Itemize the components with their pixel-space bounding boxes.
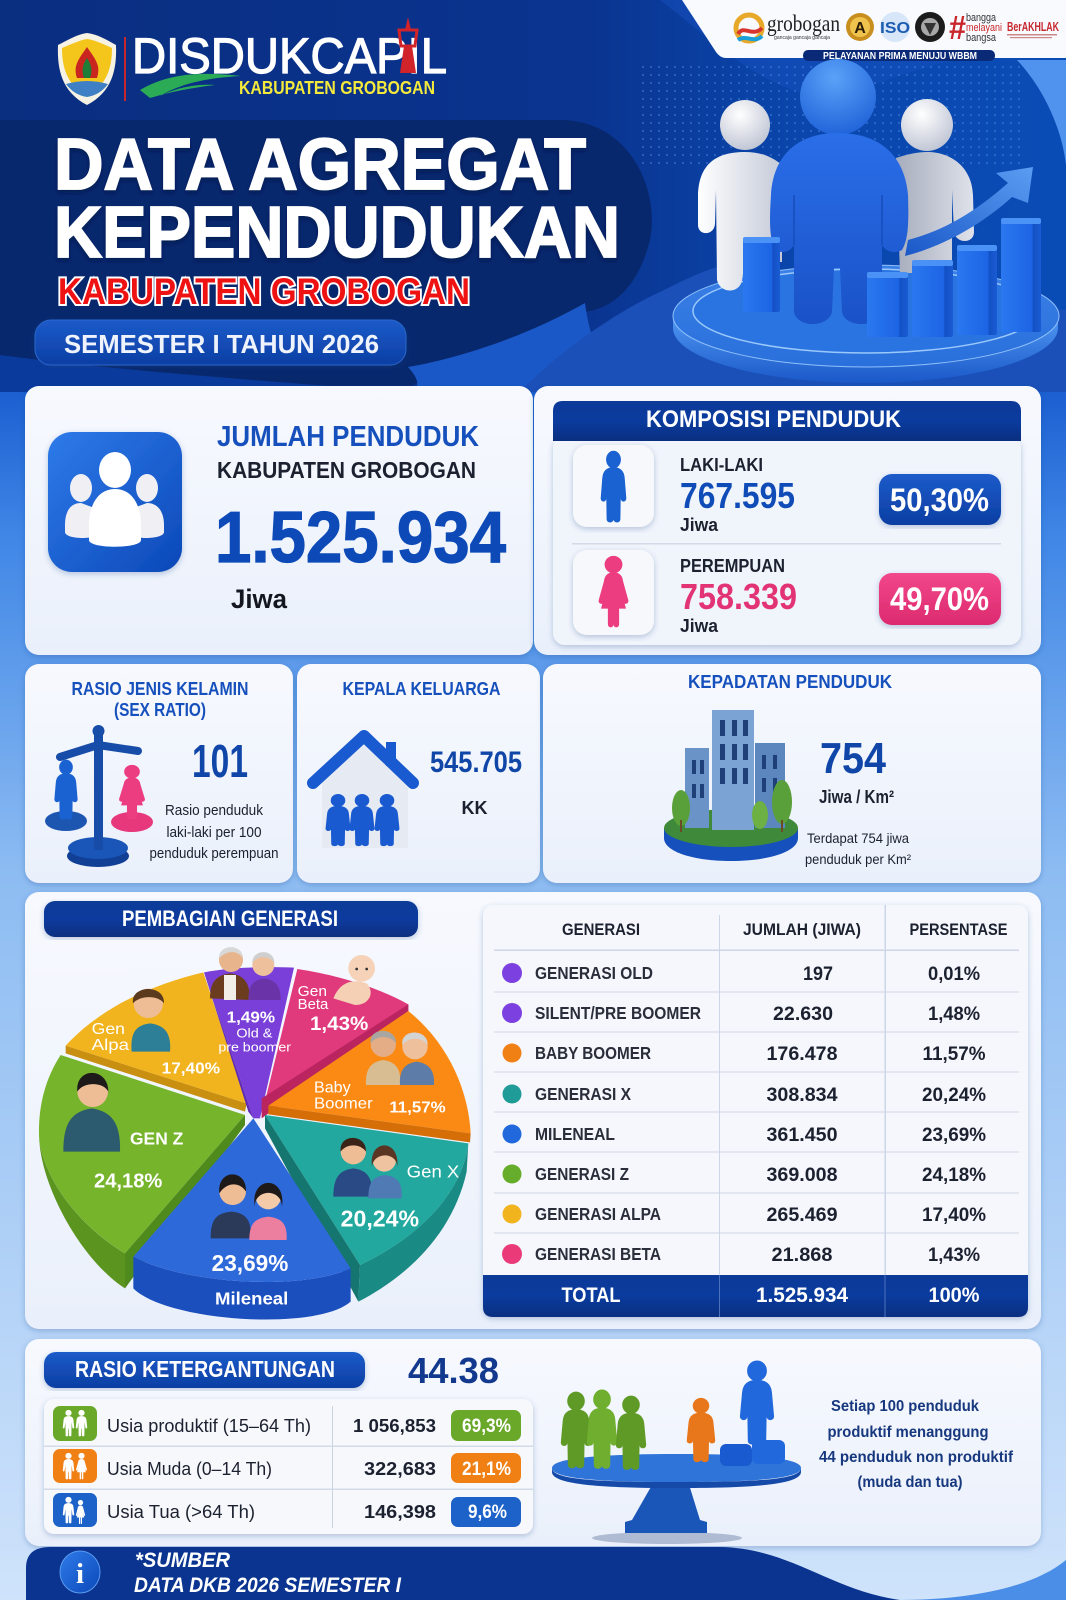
motto pill: PELAYANAN PRIMA MENUJU WBBM (823, 50, 977, 62)
panel: kepala keluarga (297, 664, 540, 883)
logo: grobogan: gancaja gancaja gancaja (774, 35, 830, 41)
pie labels: Alpa (92, 1037, 129, 1054)
slice: gen beta (262, 969, 408, 1118)
table persentase values: 17,40% (922, 1205, 986, 1226)
pie labels: 17,40% (162, 1060, 220, 1077)
icon: balance scale (45, 725, 153, 867)
table row labels: GENERASI ALPA (535, 1204, 661, 1224)
top right logo band (682, 0, 1066, 62)
title (54, 125, 620, 273)
panel: kepala keluarga: KK (462, 798, 488, 818)
table persentase values: 11,57% (922, 1044, 986, 1065)
figure: blue person (770, 59, 908, 324)
table row labels: MILENEAL (535, 1124, 615, 1144)
avatar: alpa boy (131, 989, 170, 1052)
logo: ISO (880, 12, 910, 42)
pie labels: 20,24% (341, 1206, 419, 1232)
table header: PERSENTASE (910, 920, 1008, 939)
text: dependency explanation: 44 penduduk non produktif (819, 1449, 1014, 1466)
logo: grobogan: grobogan (767, 11, 840, 36)
row: usia muda (53, 1449, 521, 1483)
slice: gen alpa (66, 972, 247, 1112)
table row labels: GENERASI OLD (535, 963, 653, 983)
panel: kepadatan penduduk: 754 (820, 734, 886, 783)
row: perempuan: 49,70% (890, 581, 989, 617)
table row labels: GENERASI BETA (535, 1244, 661, 1264)
pie labels: 11,57% (389, 1099, 446, 1116)
subtitle: KABUPATEN GROBOGAN (58, 271, 470, 312)
heading pill: RASIO KETERGANTUNGAN (75, 1356, 335, 1382)
text: dependency explanation: Setiap 100 penduduk (831, 1398, 979, 1415)
logo: accreditation A (846, 13, 874, 41)
table jumlah values: 361.450 (766, 1125, 838, 1146)
logo: accreditation A: A (854, 20, 866, 37)
pie chart (39, 947, 471, 1320)
panel: pembagian generasi (25, 892, 1041, 1329)
table total row: 100% (928, 1284, 980, 1307)
row: laki-laki: Jiwa (680, 515, 719, 535)
pie labels: Boomer (314, 1095, 373, 1112)
row: usia tua (53, 1493, 521, 1527)
heading pill: PEMBAGIAN GENERASI (122, 906, 338, 931)
logo: seal (915, 12, 945, 42)
table header: GENERASI (562, 920, 640, 939)
table jumlah values: 176.478 (766, 1044, 838, 1065)
figure: grey person (896, 99, 974, 273)
table jumlah values: 197 (803, 964, 833, 985)
title: KEPENDUDUKAN (54, 193, 620, 273)
pie labels: Gen (298, 984, 327, 1000)
table jumlah values (766, 964, 838, 1266)
logo: bangga melayani bangsa: melayani (966, 22, 1002, 34)
panel: rasio ketergantungan (25, 1339, 1041, 1546)
table persentase values (922, 964, 986, 1266)
disdukcapil logo: KABUPATEN GROBOGAN (239, 78, 435, 98)
pie labels (92, 984, 460, 1308)
icon: shield (58, 33, 116, 105)
table: generasi (483, 905, 1028, 1317)
table jumlah values: 369.008 (766, 1165, 838, 1186)
pie labels: pre boomer (218, 1041, 291, 1055)
table total row: TOTAL (562, 1284, 621, 1307)
panel: kepadatan penduduk: Terdapat 754 jiwa (807, 830, 909, 846)
text: dependency explanation: (muda dan tua) (858, 1474, 962, 1491)
table jumlah values: 265.469 (766, 1205, 838, 1226)
bar chart (743, 218, 1041, 337)
row: laki-laki: 50,30% (890, 482, 989, 518)
slice: gen z (39, 1055, 245, 1288)
logo: ISO: ISO (880, 20, 910, 37)
table row labels (535, 963, 701, 1264)
table persentase values: 0,01% (928, 964, 980, 985)
panel: jumlah penduduk: 1.525.934 (215, 498, 506, 578)
panel: komposisi penduduk (534, 386, 1041, 655)
panel: kepala keluarga: KEPALA KELUARGA (342, 679, 500, 699)
table row labels: BABY BOOMER (535, 1043, 651, 1063)
footer: DATA DKB 2026 SEMESTER I (134, 1574, 402, 1597)
table jumlah values: 21.868 (772, 1245, 832, 1266)
avatar: old couple (210, 947, 281, 1000)
icon: info: i (76, 1558, 84, 1590)
icon: red tower (399, 17, 417, 73)
table: age groups (44, 1399, 533, 1534)
avatar: baby boomer couple (366, 1031, 434, 1085)
table total row (483, 1275, 1028, 1317)
panel: rasio jenis kelamin: penduduk perempuan (150, 845, 278, 862)
table row labels: SILENT/PRE BOOMER (535, 1003, 701, 1023)
slice: mileneal (133, 1118, 351, 1320)
row: perempuan: PEREMPUAN (680, 556, 785, 576)
footer (26, 1547, 1066, 1600)
heading pill (44, 901, 418, 937)
panel: jumlah penduduk: Jiwa (231, 584, 288, 614)
panel: rasio ketergantungan: 44.38 (408, 1350, 499, 1391)
pie labels: 1,43% (310, 1014, 368, 1035)
logo: bangga melayani bangsa: bangga (966, 12, 997, 24)
table row labels: GENERASI X (535, 1084, 631, 1104)
row: laki-laki: 767.595 (680, 475, 795, 516)
pie labels: Baby (314, 1079, 351, 1096)
row: usia produktif: 1 056,853 (353, 1415, 436, 1436)
logo: bangga melayani bangsa (949, 9, 1002, 46)
footer: *SUMBER (135, 1549, 231, 1572)
table persentase values: 1,48% (928, 1004, 980, 1025)
table legend dots (502, 963, 522, 1264)
panel: kepadatan penduduk: KEPADATAN PENDUDUK (688, 672, 892, 692)
panel: rasio jenis kelamin: Rasio penduduk (165, 802, 263, 819)
panel: kepadatan penduduk (543, 664, 1041, 883)
panel: jumlah penduduk: KABUPATEN GROBOGAN (217, 457, 476, 483)
row: usia muda: Usia Muda (0–14 Th) (107, 1459, 272, 1479)
row: perempuan (573, 550, 1001, 636)
title: DATA AGREGAT (54, 125, 586, 205)
pie labels: Beta (298, 997, 329, 1013)
pie labels: Mileneal (215, 1288, 288, 1308)
panel: kepadatan penduduk: penduduk per Km² (805, 851, 911, 867)
slice: baby boomer (268, 1011, 471, 1142)
panel: rasio jenis kelamin: laki-laki per 100 (166, 824, 262, 841)
heading pill (44, 1352, 365, 1388)
pie labels: Old & (236, 1027, 273, 1041)
header: KOMPOSISI PENDUDUK (646, 406, 902, 433)
slice: gen x (265, 1115, 468, 1302)
table total row: 1.525.934 (756, 1284, 848, 1307)
logo: bangga melayani bangsa: # (949, 9, 966, 46)
row: laki-laki (573, 445, 1001, 535)
table row labels: GENERASI Z (535, 1164, 629, 1184)
row: usia muda: 21,1% (462, 1459, 511, 1480)
panel: jumlah penduduk: JUMLAH PENDUDUK (217, 421, 479, 453)
semester pill (35, 320, 406, 365)
panel: kepadatan penduduk: Jiwa / Km² (819, 787, 894, 807)
pie labels: Gen (92, 1021, 125, 1038)
figure: white person (698, 100, 782, 290)
row: perempuan: Jiwa (680, 616, 719, 636)
icon: green swoosh (140, 74, 241, 98)
row: usia tua: 9,6% (468, 1502, 507, 1523)
icon: info (60, 1551, 100, 1593)
disdukcapil logo (58, 17, 447, 105)
table jumlah values: 308.834 (766, 1085, 838, 1106)
header (553, 401, 1021, 441)
table persentase values: 20,24% (922, 1085, 986, 1106)
table persentase values: 24,18% (922, 1165, 986, 1186)
semester pill: SEMESTER I TAHUN 2026 (64, 329, 379, 359)
pie labels: 24,18% (94, 1170, 163, 1192)
text: dependency explanation (819, 1398, 1014, 1491)
table persentase values: 23,69% (922, 1125, 986, 1146)
pie labels: GEN Z (130, 1128, 183, 1148)
table header (562, 920, 1008, 939)
row: usia tua: Usia Tua (>64 Th) (107, 1502, 255, 1522)
row: laki-laki: LAKI-LAKI (680, 455, 763, 475)
slice: old and pre boomer (204, 967, 294, 1118)
panel: jumlah penduduk (25, 386, 533, 655)
panel: kepala keluarga: 545.705 (430, 746, 522, 779)
pie labels: 23,69% (212, 1250, 288, 1276)
icon: people group (48, 432, 182, 572)
illustration: balance board (552, 1362, 801, 1544)
logo: grobogan (736, 11, 840, 41)
disdukcapil logo: DISDUKCAPIL (132, 28, 447, 84)
row: usia produktif: Usia produktif (15–64 Th) (107, 1416, 311, 1436)
table jumlah values: 22.630 (773, 1004, 833, 1025)
arrow (905, 167, 1033, 256)
panel: rasio jenis kelamin (25, 664, 293, 883)
pie labels: Gen X (407, 1161, 460, 1181)
row: perempuan: 758.339 (680, 576, 797, 617)
icon: house (313, 736, 413, 848)
avatar: gen z (63, 1073, 120, 1152)
panel: rasio jenis kelamin: RASIO JENIS KELAMIN (72, 679, 248, 699)
platform (673, 265, 1059, 383)
row: usia tua: 146,398 (364, 1501, 436, 1522)
table header: JUMLAH (JIWA) (743, 920, 861, 939)
text: dependency explanation: produktif menanggung (828, 1424, 988, 1441)
row: usia produktif: 69,3% (462, 1416, 511, 1437)
avatar: baby (333, 955, 375, 1005)
icon: city buildings (664, 710, 798, 861)
row: usia produktif (53, 1406, 521, 1441)
row: usia muda: 322,683 (364, 1458, 436, 1479)
panel: rasio jenis kelamin: 101 (192, 735, 248, 787)
illustration: people with growth chart (673, 59, 1059, 383)
panel: rasio jenis kelamin: (SEX RATIO) (114, 700, 206, 720)
avatar: mileneal couple (211, 1174, 287, 1240)
logo: bangga melayani bangsa: bangsa (966, 32, 997, 44)
avatar: gen x couple (333, 1138, 402, 1198)
table persentase values: 1,43% (928, 1245, 980, 1266)
pie labels: 1,49% (227, 1009, 275, 1026)
